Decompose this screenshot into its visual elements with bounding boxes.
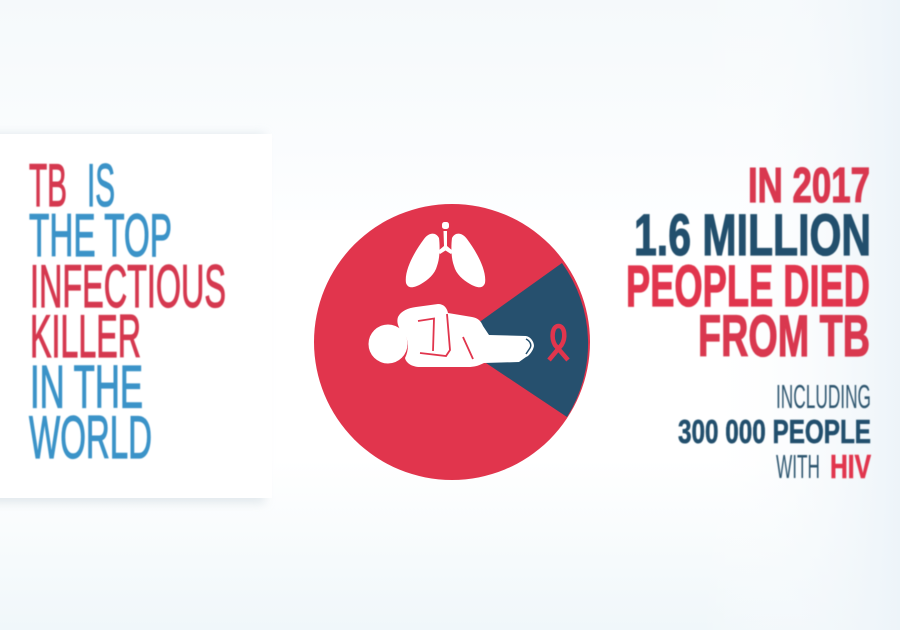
text block: including 300 000 people with HIV: WITH bbox=[776, 448, 820, 485]
icon: lungs bbox=[406, 222, 485, 287]
heading: TB is the top infectious killer in the world: INFECTIOUS bbox=[30, 253, 226, 320]
navy HIV wedge bbox=[453, 263, 588, 417]
pie chart bbox=[314, 204, 590, 480]
heading: TB is the top infectious killer in the world: IN THE bbox=[30, 354, 143, 420]
text block: including 300 000 people with HIV: HIV bbox=[830, 448, 871, 485]
heading: TB is the top infectious killer in the world: WORLD bbox=[29, 404, 152, 471]
heading: TB is the top infectious killer in the world: TB bbox=[29, 152, 67, 219]
text block: including 300 000 people with HIV bbox=[678, 378, 871, 485]
icon: fallen person bbox=[368, 304, 534, 367]
heading: TB is the top infectious killer in the world: IS bbox=[87, 152, 115, 219]
heading: TB is the top infectious killer in the world: THE TOP bbox=[29, 202, 172, 269]
text block: In 2017, 1.6 million people died from TB bbox=[626, 159, 871, 369]
heading: TB is the top infectious killer in the world bbox=[29, 152, 226, 471]
icon: red ribbon bbox=[549, 326, 568, 360]
heading: TB is the top infectious killer in the world: KILLER bbox=[30, 303, 141, 370]
panel: left white card bbox=[0, 134, 272, 503]
